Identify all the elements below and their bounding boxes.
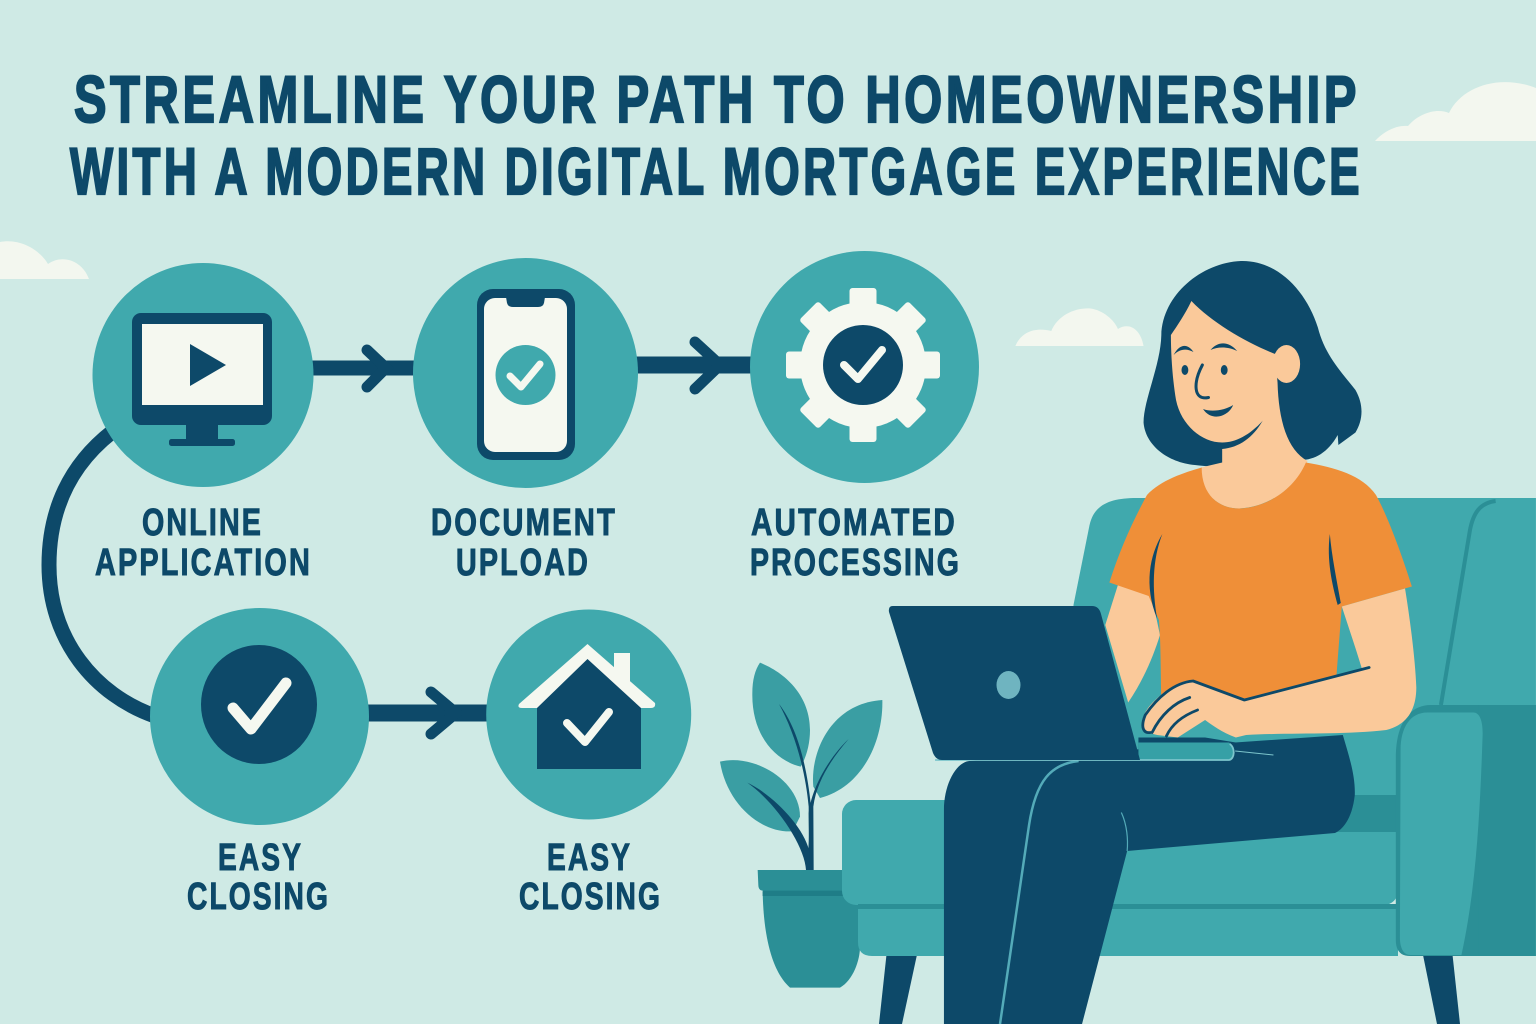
step 3: automated processing icon [750, 251, 979, 483]
neck [1201, 370, 1308, 508]
hair [1144, 261, 1362, 466]
icon: phone with check [477, 289, 575, 460]
laptop logo [996, 671, 1020, 699]
step 1: online application icon [92, 263, 314, 487]
sofa legs [879, 950, 1460, 1024]
sofa seat cushions [842, 795, 1398, 956]
step 4: easy closing icon [150, 608, 369, 825]
left arm [1105, 585, 1160, 702]
label: online application: ONLINE [142, 502, 263, 544]
label: document upload: UPLOAD [456, 542, 590, 584]
label: easy closing (second): EASY [547, 837, 632, 879]
step 5: easy closing home icon [486, 610, 691, 820]
cloud: top right [1375, 82, 1536, 141]
label: document upload: DOCUMENT [431, 502, 617, 544]
arrow: document upload to automated processing [634, 342, 754, 389]
icon: house with check [518, 644, 655, 769]
label: easy closing (first): EASY [218, 837, 303, 879]
sofa back and arm [1073, 498, 1536, 956]
arrow: curved connector from online application to easy closing [49, 432, 155, 716]
icon: gear with check [786, 288, 940, 442]
sofa [842, 498, 1536, 1024]
title [70, 62, 1363, 208]
label: online application: APPLICATION [95, 542, 312, 584]
arrow: easy closing to easy closing [365, 692, 490, 734]
label: automated processing: AUTOMATED [751, 502, 957, 544]
label: document upload [431, 502, 617, 584]
laptop base [935, 738, 1273, 761]
sofa arm rest [1396, 705, 1483, 956]
woman with laptop [935, 261, 1416, 1024]
orange shirt [1109, 462, 1412, 708]
cloud: middle [1015, 308, 1144, 346]
cloud: left [0, 241, 89, 279]
face [1171, 301, 1300, 442]
label: online application [95, 502, 312, 584]
icon: check circle [201, 645, 317, 764]
pants [944, 735, 1355, 1024]
step 2: document upload icon [413, 258, 638, 488]
plant leaves [720, 663, 882, 831]
right arm and hand [1143, 588, 1416, 738]
label: easy closing (first) [187, 837, 330, 918]
plant pot [758, 870, 860, 988]
laptop lid [889, 606, 1140, 760]
label: automated processing: PROCESSING [750, 542, 961, 584]
arrow: online application to document upload [310, 350, 416, 387]
label: easy closing (second): CLOSING [519, 876, 662, 918]
label: easy closing (second) [519, 837, 662, 918]
label: automated processing [750, 502, 961, 584]
icon: monitor [132, 313, 272, 446]
plant stems [747, 704, 849, 870]
potted plant [720, 663, 882, 988]
label: easy closing (first): CLOSING [187, 876, 330, 918]
